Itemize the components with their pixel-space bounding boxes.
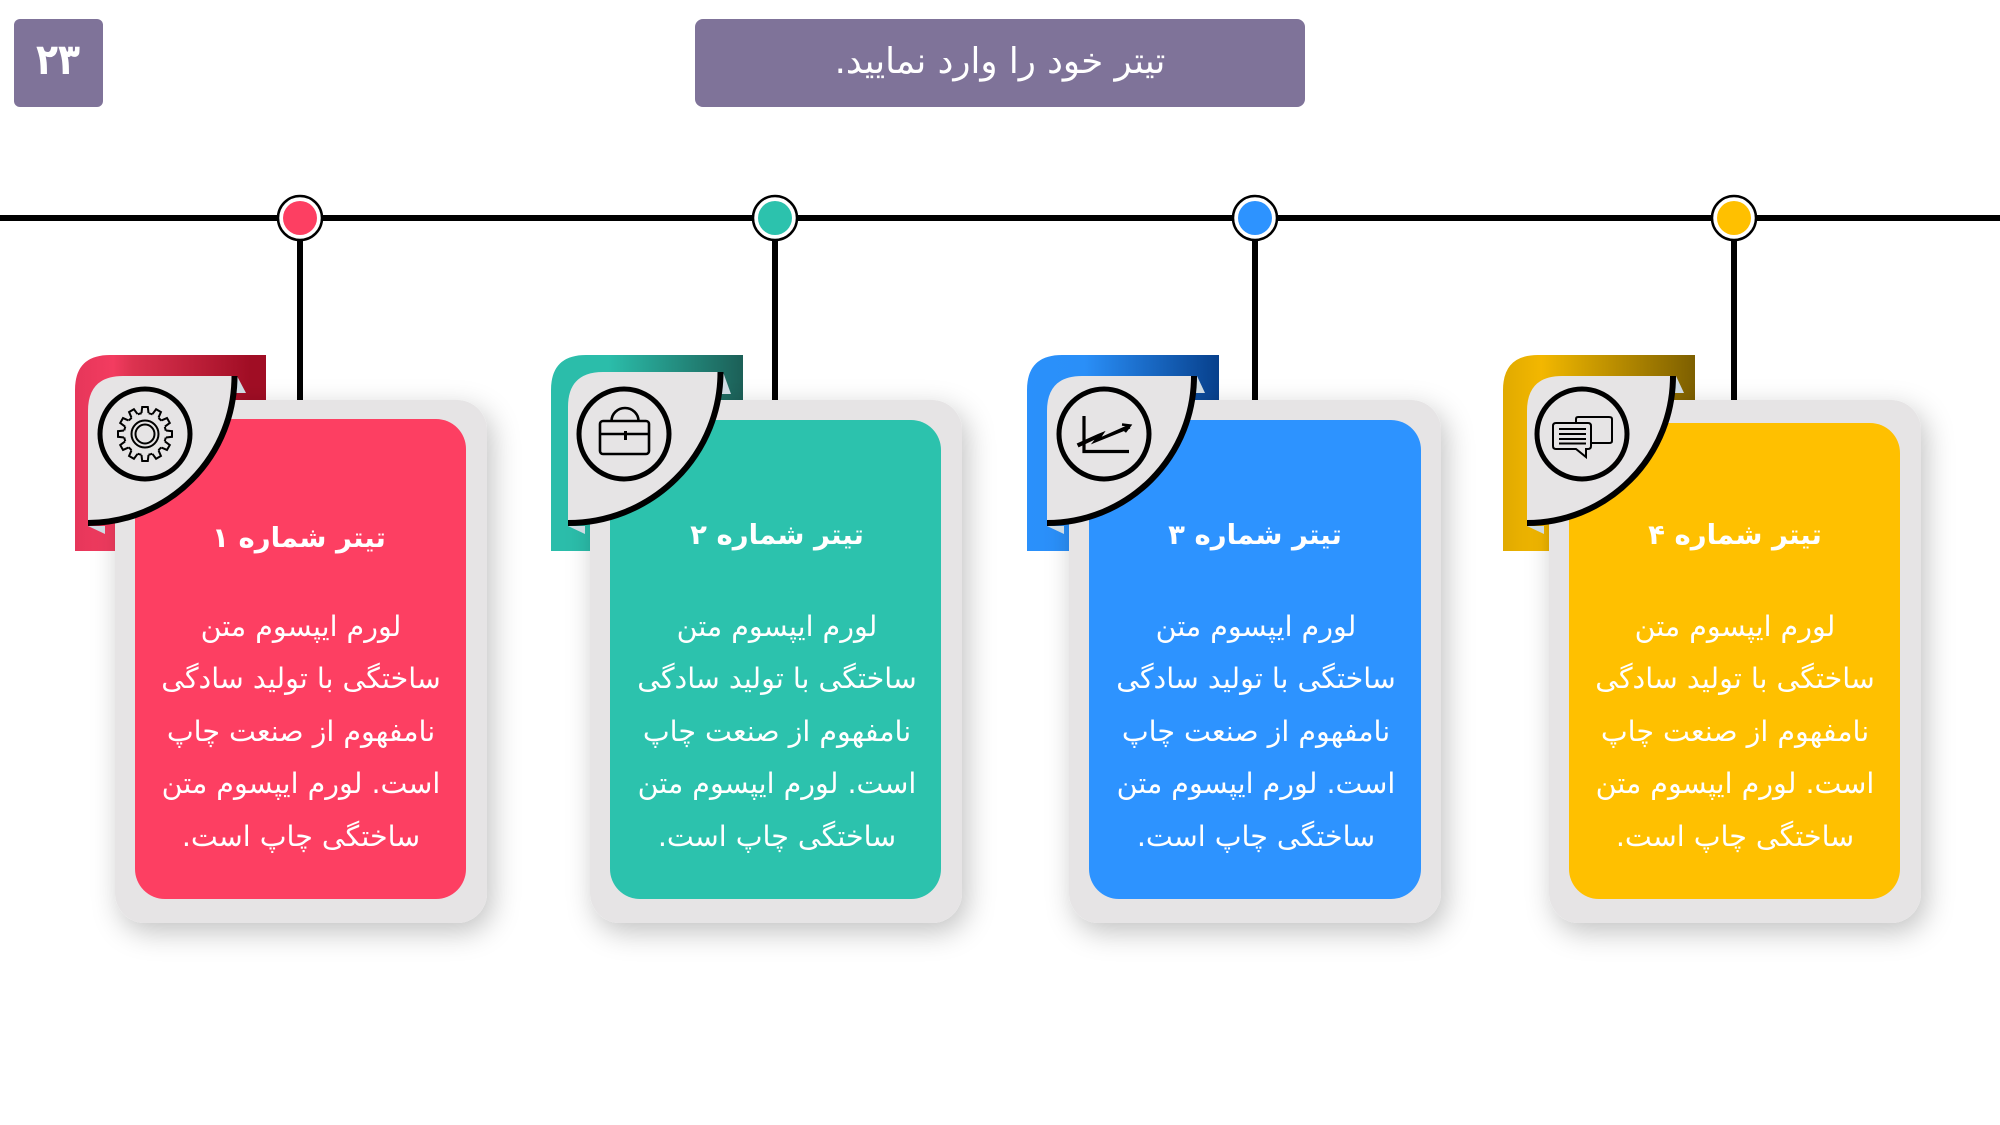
connector 2 bbox=[772, 240, 778, 402]
card body 1: ساختگی با تولید سادگی bbox=[161, 662, 441, 695]
fold corners 4 bbox=[1527, 376, 1684, 534]
fold corners 3 bbox=[1047, 376, 1205, 534]
card body 4 bbox=[1595, 610, 1875, 853]
icon: chart bbox=[1059, 389, 1149, 479]
card body 4: نامفهوم از صنعت چاپ bbox=[1601, 715, 1869, 748]
timeline marker 3 bbox=[1233, 196, 1277, 240]
connector 3 bbox=[1252, 240, 1258, 402]
card fill 2 bbox=[610, 420, 941, 899]
card heading 4: تیتر شماره ۴ bbox=[1648, 519, 1822, 551]
card body 4: ساختگی چاپ است. bbox=[1616, 820, 1854, 853]
icon: chat bubbles bbox=[1537, 389, 1627, 479]
card 2 bbox=[551, 196, 962, 923]
title banner: تیتر خود را وارد نمایید. bbox=[835, 41, 1165, 82]
card body 3: ساختگی با تولید سادگی bbox=[1116, 662, 1396, 695]
card fill 1 bbox=[135, 419, 466, 899]
card body 2: ساختگی با تولید سادگی bbox=[637, 662, 917, 695]
card body 3: است. لورم ایپسوم متن bbox=[1117, 767, 1395, 800]
quarter leaf 3 bbox=[1047, 376, 1194, 523]
connector 4 bbox=[1731, 240, 1737, 402]
card fill 3 bbox=[1089, 420, 1421, 899]
card heading 3: تیتر شماره ۳ bbox=[1168, 519, 1342, 551]
card body 1: ساختگی چاپ است. bbox=[182, 820, 420, 853]
card body 3: لورم ایپسوم متن bbox=[1156, 610, 1356, 643]
card body 2: است. لورم ایپسوم متن bbox=[638, 767, 916, 800]
card body 4: لورم ایپسوم متن bbox=[1635, 610, 1835, 643]
card body 1 bbox=[161, 610, 441, 853]
card body 4: ساختگی با تولید سادگی bbox=[1595, 662, 1875, 695]
icon: briefcase bbox=[579, 389, 669, 479]
timeline marker 4 bbox=[1712, 196, 1756, 240]
card heading 1: تیتر شماره ۱ bbox=[212, 522, 386, 554]
card body 4: است. لورم ایپسوم متن bbox=[1596, 767, 1874, 800]
connector 1 bbox=[297, 240, 303, 402]
card body 1: نامفهوم از صنعت چاپ bbox=[167, 715, 435, 748]
ribbon 2 bbox=[551, 355, 743, 551]
card 3 bbox=[1027, 196, 1441, 923]
card frame 3 bbox=[1069, 400, 1441, 923]
card 1 bbox=[75, 196, 487, 923]
timeline marker 2 bbox=[753, 196, 797, 240]
card body 3: نامفهوم از صنعت چاپ bbox=[1122, 715, 1390, 748]
card frame 1 bbox=[115, 400, 487, 923]
ribbon 4 bbox=[1503, 355, 1695, 551]
icon: gear bbox=[100, 389, 190, 479]
timeline marker 1 bbox=[278, 196, 322, 240]
fold corners 2 bbox=[568, 372, 731, 534]
fold corners 1 bbox=[88, 376, 246, 534]
card body 1: است. لورم ایپسوم متن bbox=[162, 767, 440, 800]
ribbon 3 bbox=[1027, 355, 1219, 551]
card body 3 bbox=[1116, 610, 1396, 853]
card fill 4 bbox=[1569, 423, 1900, 899]
slide number badge: ۲۳ bbox=[36, 35, 80, 85]
card 4 bbox=[1503, 196, 1921, 923]
card frame 4 bbox=[1549, 400, 1921, 923]
card body 1: لورم ایپسوم متن bbox=[201, 610, 401, 643]
card body 3: ساختگی چاپ است. bbox=[1137, 820, 1375, 853]
title banner bbox=[695, 19, 1305, 107]
card heading 2: تیتر شماره ۲ bbox=[690, 519, 864, 551]
quarter leaf 4 bbox=[1527, 376, 1673, 523]
card body 2: لورم ایپسوم متن bbox=[677, 610, 877, 643]
card frame 2 bbox=[590, 400, 962, 923]
timeline line bbox=[0, 215, 2000, 221]
quarter leaf 2 bbox=[568, 372, 720, 523]
slide number badge bbox=[14, 19, 103, 107]
card body 2 bbox=[637, 610, 917, 853]
card body 2: ساختگی چاپ است. bbox=[658, 820, 896, 853]
ribbon 1 bbox=[75, 355, 266, 551]
card body 2: نامفهوم از صنعت چاپ bbox=[643, 715, 911, 748]
quarter leaf 1 bbox=[88, 376, 234, 523]
